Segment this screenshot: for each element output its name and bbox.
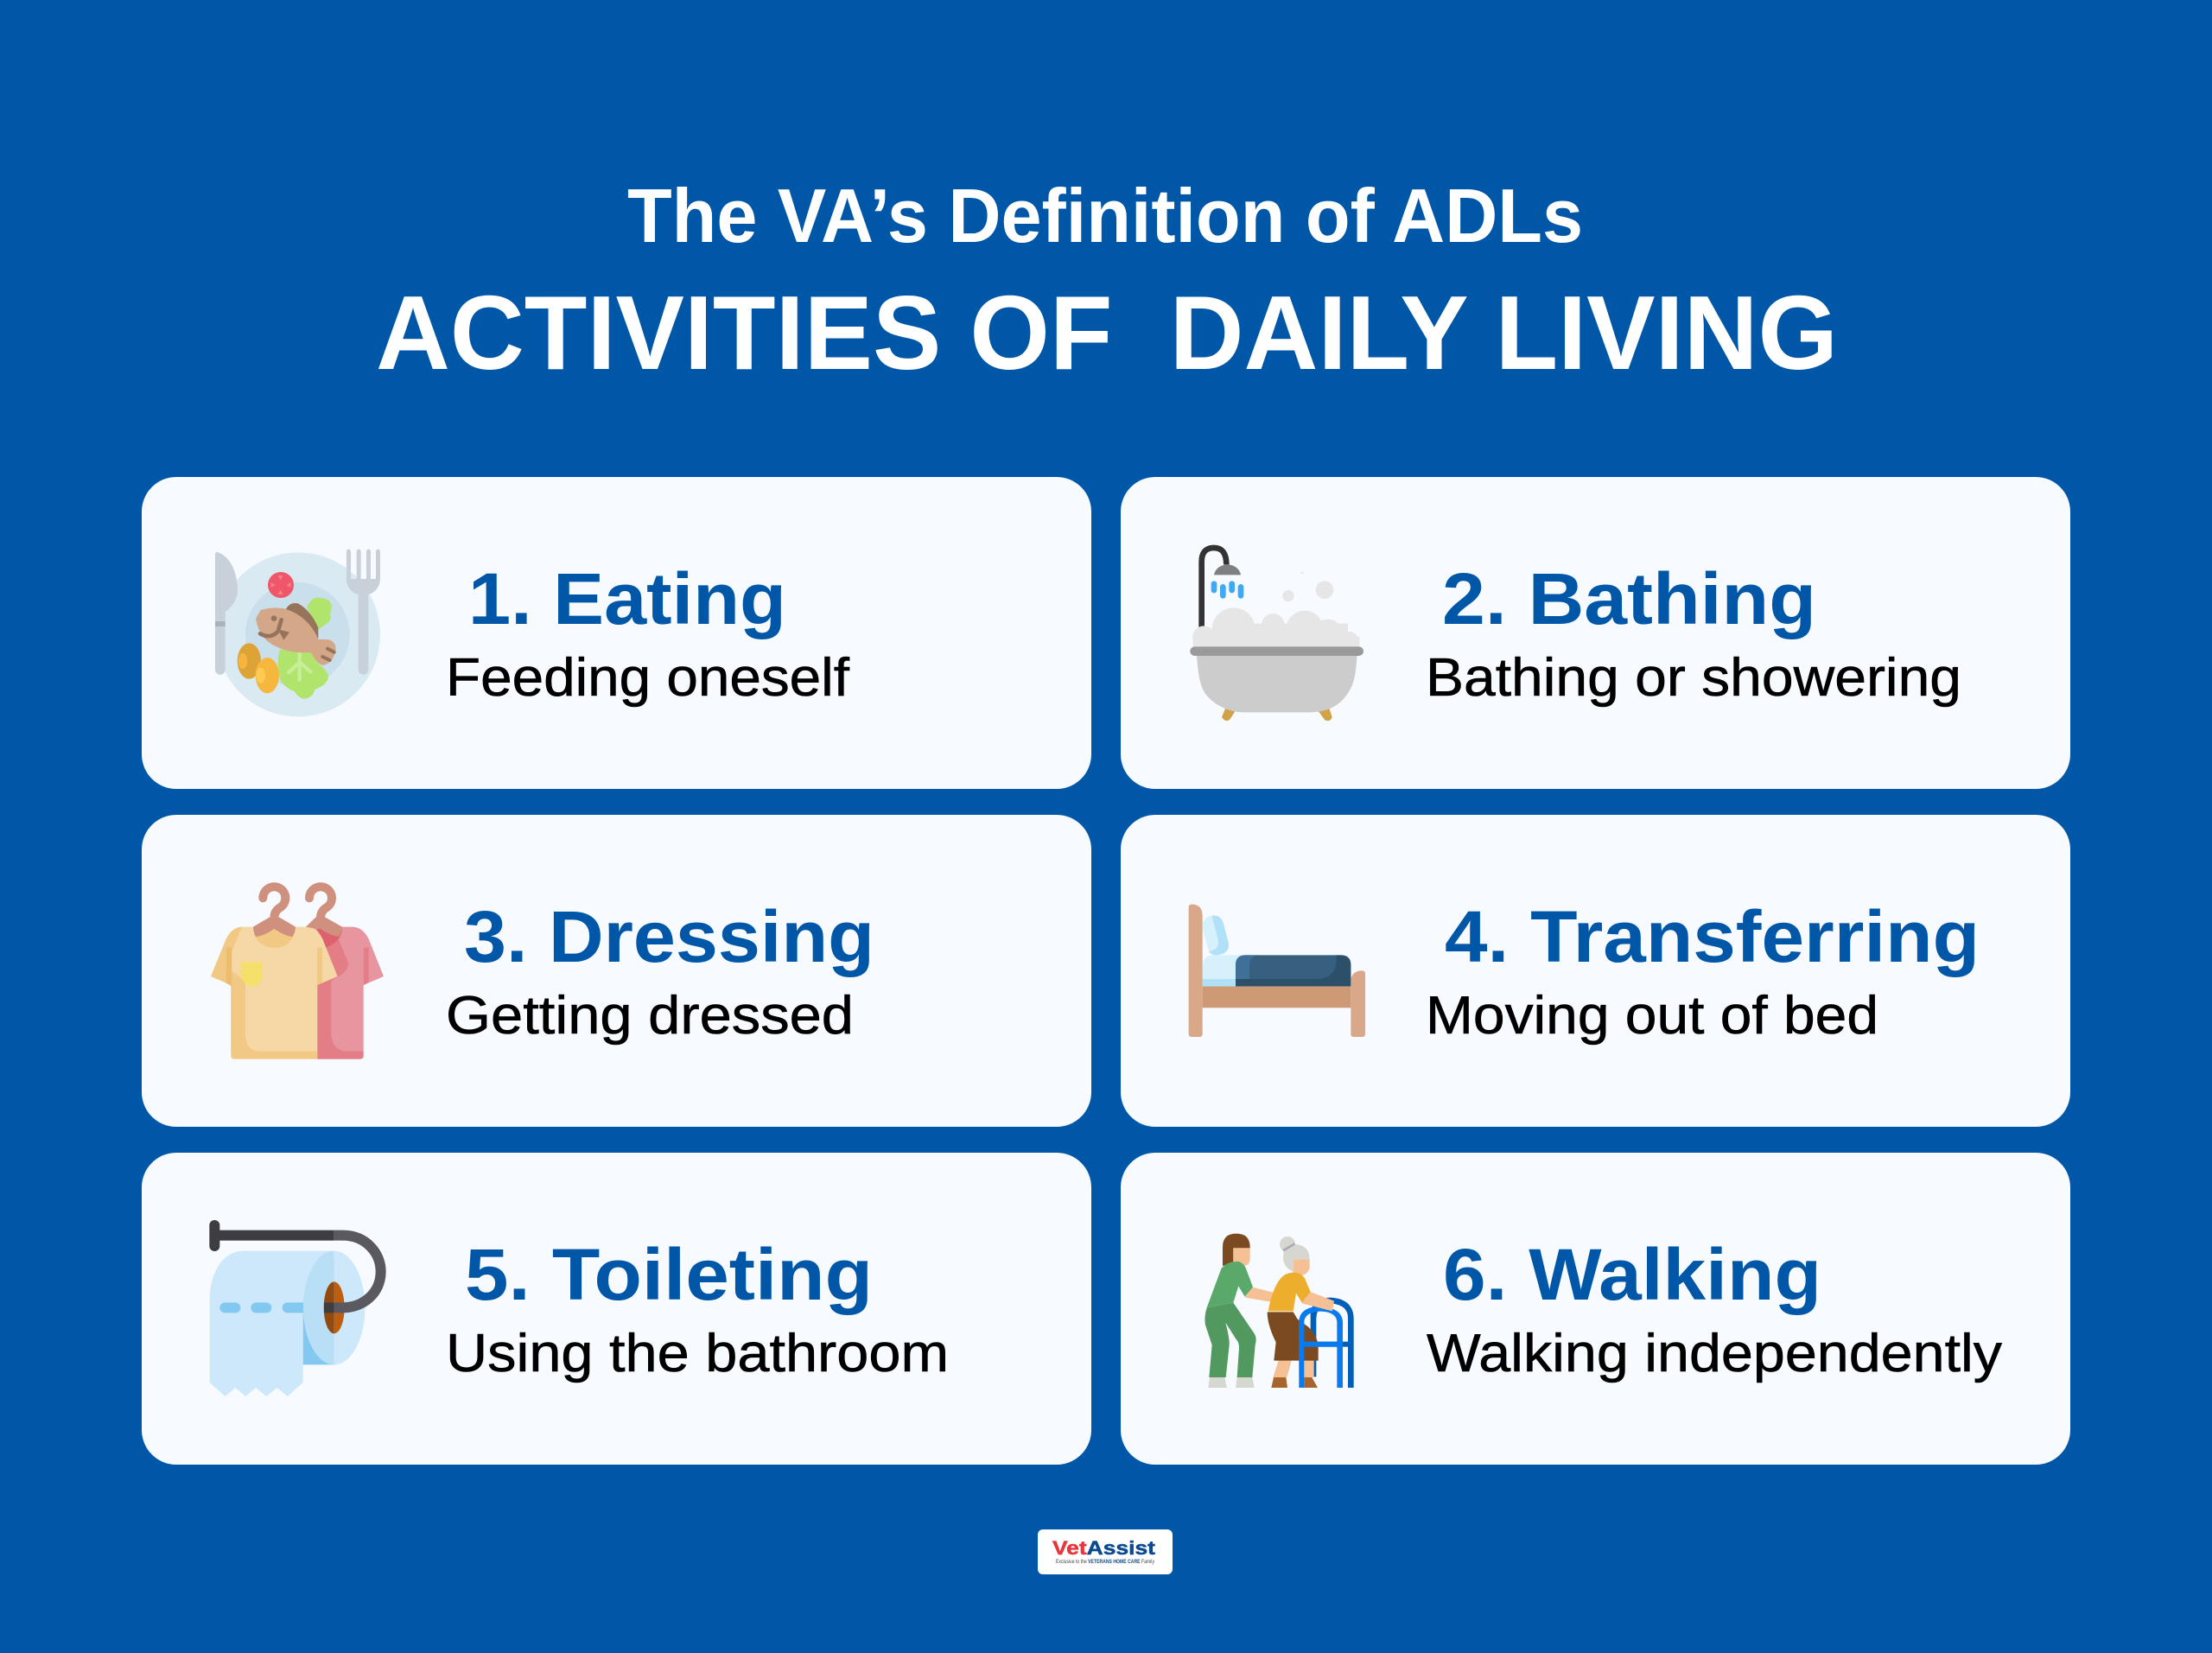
description: Bathing or showering: [1426, 648, 1961, 708]
card background: [1121, 477, 2070, 789]
heading: 1. Eating: [468, 558, 786, 639]
heading: 2. Bathing: [1442, 558, 1816, 639]
heading: 5. Toileting: [465, 1234, 873, 1315]
card background: [142, 477, 1091, 789]
description: Walking independently: [1427, 1324, 2002, 1383]
card background: [142, 815, 1091, 1127]
logo wordmark: Vet Assist: [1052, 1537, 1156, 1559]
heading: 4. Transferring: [1445, 896, 1980, 977]
logo badge: [1038, 1529, 1173, 1574]
panel: dressing: [142, 815, 1091, 1127]
panel: eating: [142, 477, 1091, 789]
description: Moving out of bed: [1426, 986, 1878, 1046]
description: Feeding oneself: [446, 648, 850, 708]
card background: [1121, 815, 2070, 1127]
card background: [1121, 1153, 2070, 1465]
heading: 3. Dressing: [464, 896, 874, 977]
logo: VetAssist: [1038, 1529, 1173, 1574]
panel: transferring: [1121, 815, 2070, 1127]
icon: caregiver and elder with walker: [1205, 1234, 1354, 1388]
panel: walking: [1121, 1153, 2070, 1465]
icon: toilet paper roll: [209, 1220, 381, 1396]
description: Getting dressed: [446, 986, 854, 1046]
main heading: ACTIVITIES OF DAILY LIVING: [376, 274, 1838, 391]
icon: shirts on hangers: [211, 887, 384, 1059]
logo tagline: Exclusive to the VETERANS HOME CARE Family: [1056, 1560, 1154, 1565]
icon: bed: [1189, 905, 1365, 1037]
icon: bathtub: [1190, 548, 1363, 721]
card background: [142, 1153, 1091, 1465]
panel: bathing: [1121, 477, 2070, 789]
heading: 6. Walking: [1443, 1234, 1821, 1315]
panel: toileting: [142, 1153, 1091, 1465]
title: [376, 173, 1838, 391]
subtitle: The VA's Definition of ADLs: The VA’s Definition of ADLs: [627, 173, 1583, 258]
description: Using the bathroom: [446, 1324, 949, 1383]
icon: plate with fish: [215, 550, 380, 716]
